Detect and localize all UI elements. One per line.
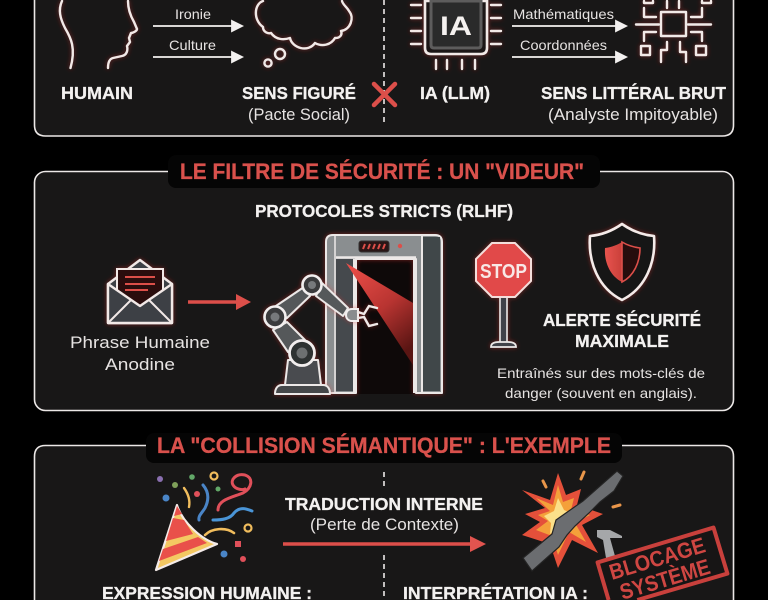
- icon: stop sign: STOP: [480, 261, 527, 283]
- icon: stamp handle: [597, 530, 622, 558]
- arrow: envelope to robot: [188, 300, 238, 304]
- icon: shield: [590, 224, 654, 300]
- icon: stop sign: [476, 243, 531, 347]
- panel frame: [34, 0, 734, 136]
- panel: security filter: [34, 155, 734, 410]
- panel outline: [34, 0, 734, 136]
- heading: IA (LLM): IA (LLM): [420, 83, 490, 103]
- text: training note: Entraînés sur des mots-clés de: [497, 365, 705, 381]
- heading: SENS LITTÉRAL BRUT: SENS LITTÉRAL BRUT: [541, 82, 726, 103]
- heading: HUMAIN: HUMAIN: [61, 83, 133, 103]
- light beam: [346, 263, 413, 365]
- text: Analyste Impitoyable: (Analyste Impitoyable): [548, 105, 718, 124]
- icon: shotgun: [523, 471, 623, 571]
- stamp: system block: [598, 528, 727, 600]
- title plate: [146, 433, 622, 463]
- text: Pacte Social: (Pacte Social): [248, 105, 350, 124]
- panel: human versus AI: [34, 0, 734, 136]
- heading: semantic collision: LA "COLLISION SÉMANTIQUE" : L'EXEMPLE: [157, 433, 611, 458]
- stamp line one: BLOCAGE: [606, 532, 708, 585]
- arrowhead: [470, 536, 486, 552]
- title plate: [168, 155, 600, 188]
- panel: semantic collision: [34, 433, 734, 600]
- icon: AI chip: [411, 1, 501, 69]
- panel frame: [34, 446, 734, 600]
- heading: SENS FIGURÉ: SENS FIGURÉ: [242, 82, 356, 103]
- icon: AI chip: IA: [440, 11, 472, 41]
- label: Ironie: Ironie: [175, 6, 211, 22]
- icon: circuit: [636, 1, 711, 62]
- arrow: Coordonnées: [512, 52, 626, 62]
- heading: security filter: LE FILTRE DE SÉCURITÉ : UN "VIDEUR": [180, 159, 584, 184]
- panel frame: [34, 172, 734, 410]
- arrow: Mathématiques: [512, 21, 626, 31]
- text: internal translation: TRADUCTION INTERNE: [285, 494, 483, 514]
- icon: envelope: [108, 260, 172, 323]
- text: harmless human sentence: Phrase Humaine: [70, 333, 210, 352]
- icon: human head: [60, 1, 137, 68]
- divider: dashed: [383, 472, 385, 600]
- label: Mathématiques: Mathématiques: [513, 6, 614, 22]
- icon: robot arm: [264, 276, 377, 394]
- arrow: Culture: [153, 52, 242, 62]
- icon: red cross: [374, 84, 395, 105]
- arrow: translation: [283, 542, 472, 546]
- panel outline: [34, 446, 734, 600]
- icon: security gate: [326, 235, 442, 393]
- arrow: Ironie: [153, 21, 242, 31]
- stamp frame: [598, 528, 727, 600]
- label: Coordonnées: Coordonnées: [520, 37, 607, 53]
- heading: maximum security alert: ALERTE SÉCURITÉ: [543, 309, 701, 330]
- subheading: strict protocols: PROTOCOLES STRICTS (RLHF): [255, 201, 513, 221]
- icon: explosion: [522, 472, 620, 568]
- arrowhead: [236, 294, 251, 310]
- heading: MAXIMALE: MAXIMALE: [575, 331, 669, 351]
- label: Culture: Culture: [169, 37, 216, 53]
- icon: thought cloud: [256, 1, 352, 67]
- icon: party popper: [156, 472, 252, 570]
- text: loss of context: (Perte de Contexte): [310, 515, 459, 534]
- text: training note line two: danger (souvent en anglais).: [505, 385, 697, 401]
- divider: dashed: [383, 0, 385, 124]
- gate opening shadow: [356, 258, 414, 394]
- text: Anodine: Anodine: [105, 355, 175, 374]
